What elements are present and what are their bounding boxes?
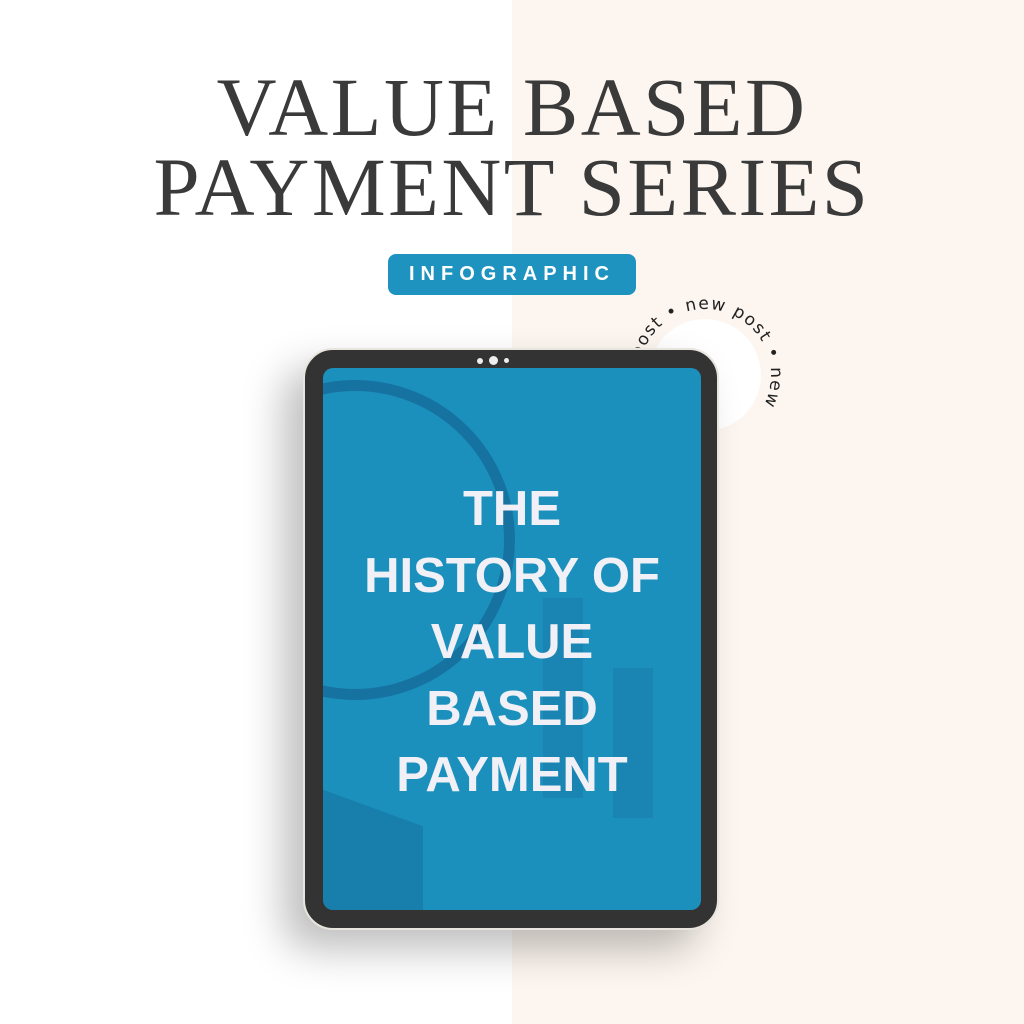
- title: [154, 61, 870, 233]
- title: PAYMENT SERIES: [154, 141, 870, 233]
- magnifier ring: [195, 380, 515, 700]
- screen: [323, 368, 701, 910]
- badge: infographic: INFOGRAPHIC: [409, 263, 615, 285]
- screen title: BASED: [426, 682, 598, 736]
- tablet: [303, 348, 719, 930]
- circular text: new post: post • new post • new: [635, 299, 780, 408]
- badge: infographic: [388, 254, 636, 295]
- chart bars: [543, 598, 583, 798]
- screen title: VALUE: [431, 615, 593, 669]
- screen title: PAYMENT: [396, 748, 628, 802]
- title: VALUE BASED: [217, 61, 807, 153]
- screen title: THE: [463, 482, 561, 536]
- screen title: [364, 482, 660, 802]
- camera dots: [477, 356, 509, 365]
- screen title: HISTORY OF: [364, 548, 660, 602]
